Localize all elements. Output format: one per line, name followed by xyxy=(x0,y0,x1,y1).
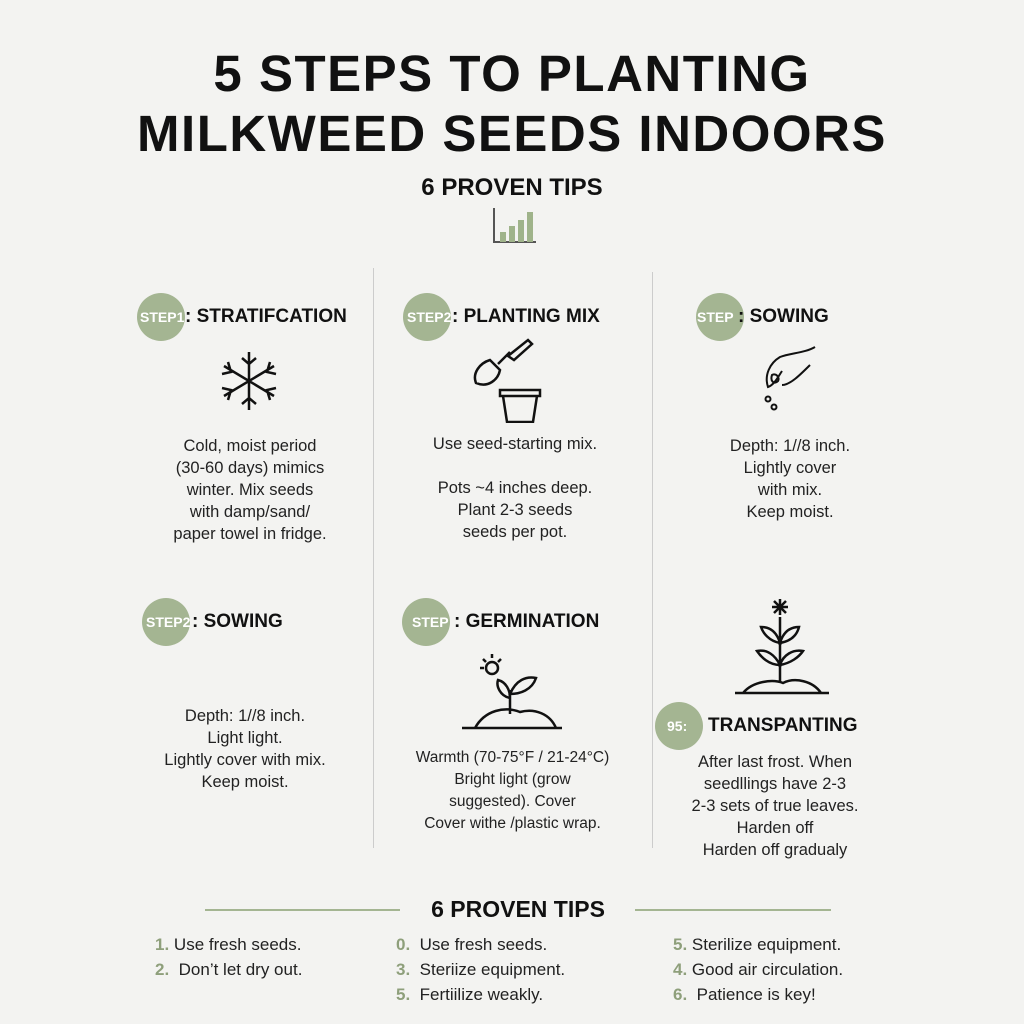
panel: step 6 transplanting: TRANSPANTING xyxy=(708,715,858,736)
panel: step 2 planting mix: Plant 2-3 seeds xyxy=(458,501,572,519)
panel: step 6 transplanting: 95: xyxy=(667,718,687,734)
panel: step 1: Cold, moist period xyxy=(184,437,316,455)
icon: chart xyxy=(493,208,536,243)
panel: step 6 transplanting: Harden off xyxy=(737,819,813,837)
panel: step 1: (30-60 days) mimics xyxy=(176,459,324,477)
tips column 3: 4. Good air circulation. xyxy=(673,960,843,979)
panel: step 4 sowing: Depth: 1//8 inch. xyxy=(185,707,305,725)
panel: step 3 sowing: : SOWING xyxy=(738,306,829,327)
panel: step 5 germination: Warmth (70-75°F / 21-24°C) xyxy=(416,749,609,766)
tips column 2: 3. Steriize equipment. xyxy=(396,960,565,979)
tips column 2 xyxy=(396,935,565,1004)
icon: trowel and pot xyxy=(474,338,542,423)
panel: step 1: STEP1 xyxy=(140,309,184,325)
panel: step 4 sowing: STEP2 xyxy=(146,614,190,630)
panel: step 2 planting mix: : PLANTING MIX xyxy=(452,306,600,327)
icon: flower plant xyxy=(735,599,829,694)
panel: step 2 planting mix: Pots ~4 inches deep. xyxy=(438,479,592,497)
panel: step 1: with damp/sand/ xyxy=(190,503,310,521)
tips column 2: 0. Use fresh seeds. xyxy=(396,935,547,954)
tips column 3: 5. Sterilize equipment. xyxy=(673,935,841,954)
panel: step 5 germination: : GERMINATION xyxy=(454,611,599,632)
panel: step 4 sowing xyxy=(142,598,326,791)
tips column 2: 5. Fertiilize weakly. xyxy=(396,985,543,1004)
panel: step 1: winter. Mix seeds xyxy=(187,481,313,499)
title: 5 STEPS TO PLANTING xyxy=(213,45,811,102)
panel: step 1 xyxy=(137,293,347,543)
icon: hand sowing xyxy=(764,346,816,410)
title xyxy=(137,45,887,162)
panel: step 3 sowing: STEP xyxy=(697,309,734,325)
panel: step 5 germination: suggested). Cover xyxy=(449,793,576,810)
panel: step 4 sowing: Keep moist. xyxy=(201,773,289,791)
panel: step 5 germination: Bright light (grow xyxy=(454,771,571,788)
panel: step 1: : STRATIFCATION xyxy=(185,306,347,327)
tips column 1: 2. Don’t let dry out. xyxy=(155,960,302,979)
panel: step 3 sowing: Depth: 1//8 inch. xyxy=(730,437,850,455)
tips column 3 xyxy=(673,935,843,1004)
panel: step 6 transplanting: After last frost. When xyxy=(698,753,852,771)
tips heading: 6 PROVEN TIPS xyxy=(431,896,605,922)
panel: step 5 germination: STEP xyxy=(412,614,449,630)
panel: step 3 sowing: with mix. xyxy=(758,481,822,499)
panel: step 4 sowing: : SOWING xyxy=(192,611,283,632)
panel: step 6 transplanting: Harden off gradualy xyxy=(703,841,847,859)
panel: step 2 planting mix xyxy=(403,293,600,541)
panel: step 3 sowing: Keep moist. xyxy=(746,503,834,521)
panel: step 6 transplanting: seedllings have 2-3 xyxy=(704,775,846,793)
panel: step 4 sowing: Lightly cover with mix. xyxy=(164,751,326,769)
panel: step 5 germination: Cover withe /plastic wrap. xyxy=(424,815,601,832)
panel: step 3 sowing xyxy=(696,293,850,521)
subtitle: 6 PROVEN TIPS xyxy=(421,174,603,201)
panel: step 2 planting mix: STEP2 xyxy=(407,309,451,325)
panel: step 2 planting mix: seeds per pot. xyxy=(463,523,567,541)
panel: step 3 sowing: Lightly cover xyxy=(744,459,836,477)
tips column 1 xyxy=(155,935,302,979)
panel: step 4 sowing: Light light. xyxy=(207,729,283,747)
panel: step 2 planting mix: Use seed-starting mix. xyxy=(433,435,597,453)
icon: snowflake xyxy=(222,352,276,410)
title: MILKWEED SEEDS INDOORS xyxy=(137,105,887,162)
icon: sprout xyxy=(462,654,562,730)
tips column 3: 6. Patience is key! xyxy=(673,985,816,1004)
tips column 1: 1. Use fresh seeds. xyxy=(155,935,301,954)
panel: step 1: paper towel in fridge. xyxy=(173,525,327,543)
panel: step 6 transplanting: 2-3 sets of true leaves. xyxy=(692,797,858,815)
panel: step 5 germination xyxy=(402,598,609,832)
panel: step 6 transplanting xyxy=(655,599,858,859)
